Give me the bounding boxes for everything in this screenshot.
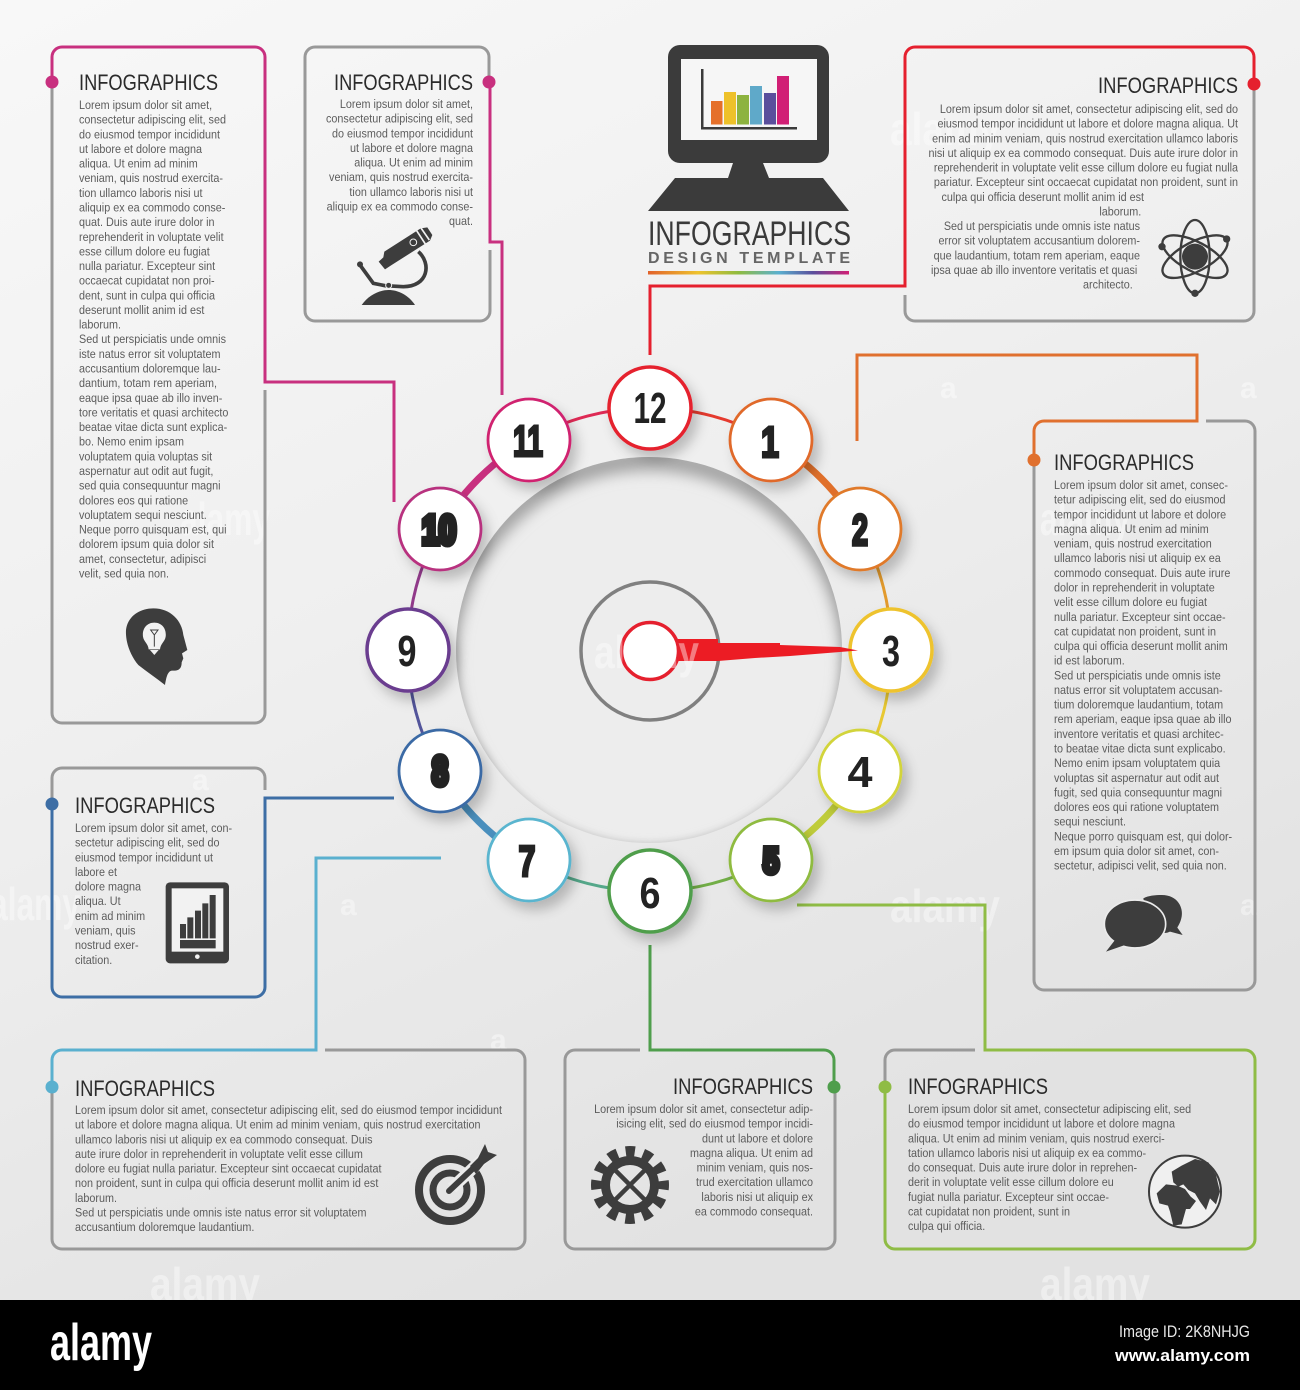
hour 7: 7 xyxy=(518,837,536,886)
body text: tore veritatis et quasi architecto xyxy=(79,407,228,420)
watermarks: alamy xyxy=(1040,1258,1150,1310)
body text: nisi ut aliquip ex ea commodo consequat. Duis aute irure dolor in xyxy=(928,147,1238,160)
body text: labore et xyxy=(75,866,118,879)
body text: non proident, sunt in culpa qui officia deserunt mollit anim id est xyxy=(75,1178,379,1190)
body text: architecto. xyxy=(1083,279,1133,292)
body text: accusantium doloremque lau- xyxy=(79,363,221,376)
body text: consectetur adipiscing elit, sed xyxy=(326,113,473,126)
body text: dent, sunt in culpa qui officia xyxy=(79,290,216,302)
hour 1 xyxy=(730,399,812,481)
hour 10 xyxy=(399,488,481,570)
body text: nulla pariatur. Excepteur sint occae- xyxy=(1054,611,1226,624)
icon: target with arrow xyxy=(419,1144,497,1221)
icon: head with light bulb xyxy=(126,608,187,685)
body text: occaecat cupidatat non proi- xyxy=(79,275,215,288)
body text: magna aliqua. Ut enim ad minim xyxy=(1054,523,1209,536)
body text: em ipsum quia dolor sit amet, con- xyxy=(1054,846,1219,858)
body text: veniam, quis nostrud exercita- xyxy=(329,172,473,184)
hour 10: 10 xyxy=(422,508,456,552)
body text: culpa qui officia deserunt mollit anim xyxy=(1054,641,1228,653)
body text xyxy=(928,104,1239,292)
body text: Lorem ipsum dolor sit amet, con- xyxy=(75,823,232,835)
body text: inventore veritatis et quasi architec- xyxy=(1054,728,1224,741)
hour 2 xyxy=(819,488,901,570)
body text: esse cillum dolore eu fugiat xyxy=(79,246,211,259)
connector arcs xyxy=(408,408,891,891)
icon: gear xyxy=(597,1152,663,1218)
body text: Sed ut perspiciatis unde omnis iste natus xyxy=(944,221,1140,233)
body text: cat cupidatat non proident, sunt in xyxy=(1054,626,1216,639)
icon: globe xyxy=(1149,1156,1221,1228)
body text: velit, sed quia non. xyxy=(79,568,169,581)
body text: Neque porro quisquam est, qui xyxy=(79,524,227,537)
body text: dolores eos qui ratione voluptatem xyxy=(1054,802,1219,814)
watermarks: alamy xyxy=(890,103,1000,155)
hour 1: 1 xyxy=(761,418,779,467)
recessed disc xyxy=(456,457,842,843)
body text: culpa qui officia. xyxy=(908,1221,985,1233)
body text: Lorem ipsum dolor sit amet, consectetur adip- xyxy=(594,1104,813,1116)
hour 12: 12 xyxy=(634,384,666,433)
image id: Image ID: 2K8NHJG xyxy=(1119,1322,1250,1341)
watermarks: a xyxy=(1240,372,1257,405)
hour 11 xyxy=(488,399,570,481)
body text: commodo consequat. Duis aute irure xyxy=(1054,567,1230,580)
body text: iste natus error sit voluptatem xyxy=(79,348,221,361)
body text: dolore magna xyxy=(75,881,142,894)
body text: dolores eos qui ratione xyxy=(79,495,188,507)
body text: ut labore et dolore magna aliqua. Ut enim ad minim veniam, quis nostrud exercitation xyxy=(75,1119,480,1132)
body text: Lorem ipsum dolor sit amet, xyxy=(79,100,212,112)
body text: cat cupidatat non proident, sunt in xyxy=(908,1206,1070,1219)
heading: INFOGRAPHICS xyxy=(1054,450,1194,475)
body text: enim ad minim xyxy=(75,910,145,923)
panel: magenta microscope xyxy=(305,47,502,395)
hour 8: 8 xyxy=(432,750,448,794)
watermarks: alamy xyxy=(150,1258,260,1310)
body text: enim ad minim veniam, quis nostrud exercitation ullamco laboris xyxy=(932,133,1238,145)
body text: aliqua. Ut xyxy=(75,896,121,908)
body text: tium doloremque laudantium, totam xyxy=(1054,699,1223,712)
body text: id est laborum. xyxy=(1054,655,1125,668)
body text: sectetur, adipisci velit, sed quia non. xyxy=(1054,860,1227,873)
body text: sequi nesciunt. xyxy=(1054,816,1126,829)
body text: aspernatur aut odit aut fugit, xyxy=(79,466,213,478)
body text: aute irure dolor in reprehenderit in voluptate velit esse cillum xyxy=(75,1148,363,1161)
body text: minim veniam, quis nos- xyxy=(697,1162,813,1175)
rainbow line xyxy=(648,271,849,274)
hour 5: 5 xyxy=(763,840,779,881)
footer bar xyxy=(0,1300,1300,1390)
body text: laborum. xyxy=(1099,206,1141,219)
body text: Sed ut perspiciatis unde omnis iste natus error sit voluptatem xyxy=(75,1207,367,1220)
icon: microscope xyxy=(357,227,432,305)
body text: laborum. xyxy=(79,319,121,332)
panel: pink top-left xyxy=(46,47,394,723)
body text: consectetur adipiscing elit, sed xyxy=(79,114,226,127)
body text: derit in voluptate velit esse cillum dolore eu xyxy=(908,1177,1114,1189)
body text: tempor incididunt ut labore et dolore xyxy=(1054,509,1226,521)
panel: light green globe xyxy=(797,905,1255,1249)
body text: Sed ut perspiciatis unde omnis xyxy=(79,334,226,346)
body text: Lorem ipsum dolor sit amet, consectetur adipiscing elit, sed do eiusmod tempor incididunt xyxy=(75,1105,503,1117)
clock hand xyxy=(672,639,858,661)
hour 7 xyxy=(488,819,570,901)
watermarks: alamy xyxy=(180,493,270,545)
body text: Nemo enim ipsam voluptatem quia xyxy=(1054,758,1221,770)
body text: dolor in reprehenderit in voluptate xyxy=(1054,582,1215,595)
body text: do eiusmod tempor incididunt ut labore et dolore magna xyxy=(908,1118,1176,1131)
icon: monitor xyxy=(648,45,849,211)
body text: dolore eu fugiat nulla pariatur. Excepteur sint occaecat cupidatat xyxy=(75,1163,382,1176)
hour 11: 11 xyxy=(513,417,543,466)
hour 6: 6 xyxy=(640,869,660,918)
hour 5 xyxy=(730,819,812,901)
body text: Lorem ipsum dolor sit amet, consec- xyxy=(1054,480,1228,492)
clock dial xyxy=(367,367,932,932)
body text: ipsa quae ab illo inventore veritatis et quasi xyxy=(931,264,1137,277)
icon: tablet with chart xyxy=(166,882,229,963)
body text: aliqua. Ut enim ad minim veniam, quis nostrud exerci- xyxy=(908,1133,1165,1145)
body text: deserunt mollit anim id est xyxy=(79,304,205,317)
logo: monitor with bar chart xyxy=(648,45,851,274)
heading: INFOGRAPHICS xyxy=(79,70,218,95)
body text: Neque porro quisquam est, qui dolor- xyxy=(1054,831,1232,844)
hour 9 xyxy=(367,609,449,691)
body text: do consequat. Duis aute irure dolor in reprehen- xyxy=(908,1162,1137,1175)
body text: tion ullamco laboris nisi ut xyxy=(349,186,474,199)
body text: que laudantium, totam rem aperiam, eaque xyxy=(934,250,1140,262)
heading: INFOGRAPHICS xyxy=(908,1074,1048,1099)
body text: error sit voluptatem accusantium dolorem- xyxy=(938,235,1140,248)
panel: green gear xyxy=(565,945,840,1249)
body text: amet, consectetur, adipisci xyxy=(79,553,206,566)
watermarks: alamy xyxy=(890,880,1000,932)
body text: aliquip ex ea commodo conse- xyxy=(327,201,473,214)
heading: INFOGRAPHICS xyxy=(673,1074,813,1099)
logo subtitle: DESIGN TEMPLATE xyxy=(648,250,850,267)
heading: INFOGRAPHICS xyxy=(334,70,473,95)
body text: eiusmod tempor incididunt ut xyxy=(75,852,214,864)
body text: fugit, sed quia consequuntur magni xyxy=(1054,787,1222,800)
body text: natus error sit voluptatem accusan- xyxy=(1054,684,1223,697)
body text: tation ullamco laboris nisi ut aliquip ex ea commo- xyxy=(908,1147,1146,1160)
watermarks: a xyxy=(340,889,357,922)
body text: voluptatem sequi nesciunt. xyxy=(79,509,207,522)
hub center xyxy=(622,622,678,680)
body text: reprehenderit in voluptate velit xyxy=(79,231,224,244)
heading: INFOGRAPHICS xyxy=(75,1076,215,1101)
watermarks: a xyxy=(192,764,209,797)
body text: dantium, totam rem aperiam, xyxy=(79,378,217,390)
logo title: INFOGRAPHICS xyxy=(648,215,851,253)
body text: voluptatem quia voluptas sit xyxy=(79,451,213,464)
panel: red atom xyxy=(650,47,1260,355)
body text: ut labore et dolore magna xyxy=(79,143,203,156)
body text: beatae vitae dicta sunt explica- xyxy=(79,422,227,434)
body text: do eiusmod tempor incididunt xyxy=(79,129,221,141)
body text: tion ullamco laboris nisi ut xyxy=(79,187,203,200)
body text: ut labore et dolore magna xyxy=(350,142,474,155)
body text: pariatur. Excepteur sint occaecat cupidatat non proident, sunt in xyxy=(934,177,1238,189)
hour 6 xyxy=(609,850,691,932)
hour 4: 4 xyxy=(848,748,873,797)
body text: aliqua. Ut enim ad minim xyxy=(354,157,473,170)
body text: Sed ut perspiciatis unde omnis iste xyxy=(1054,670,1221,682)
icon: speech bubbles xyxy=(1104,895,1183,952)
heading: INFOGRAPHICS xyxy=(1098,73,1238,98)
body text: culpa qui officia deserunt mollit anim id est xyxy=(941,192,1145,204)
panel: light blue target xyxy=(46,858,525,1249)
center watermark: alamy xyxy=(594,626,699,678)
watermarks: alamy xyxy=(1040,493,1130,545)
body text: quat. Duis aute irure dolor in xyxy=(79,217,215,229)
body text: fugiat nulla pariatur. Excepteur sint occae- xyxy=(908,1191,1109,1204)
footer logo: alamy xyxy=(50,1314,152,1372)
body text: citation. xyxy=(75,954,112,967)
body text: rem aperiam, eaque ipsa quae ab illo xyxy=(1054,714,1232,726)
body text: dunt ut labore et dolore xyxy=(702,1133,813,1145)
heading: INFOGRAPHICS xyxy=(75,793,215,818)
watermarks: a xyxy=(940,372,957,405)
body text: quat. xyxy=(449,216,473,228)
hour 3 xyxy=(850,609,932,691)
body text: ullamco laboris nisi ut aliquip ex ea commodo consequat. Duis xyxy=(75,1134,373,1146)
body text: nostrud exer- xyxy=(75,940,139,952)
body text: magna aliqua. Ut enim ad xyxy=(690,1147,813,1160)
body text: Lorem ipsum dolor sit amet, consectetur adipiscing elit, sed do xyxy=(940,104,1238,116)
body text: eiusmod tempor incididunt ut labore et dolore magna aliqua. Ut xyxy=(937,118,1239,131)
watermarks: a xyxy=(490,1024,507,1057)
body text: bo. Nemo enim ipsam xyxy=(79,436,184,449)
body text: veniam, quis xyxy=(75,925,136,938)
body text: Lorem ipsum dolor sit amet, xyxy=(340,99,473,111)
hour 4 xyxy=(819,730,901,812)
body text: Lorem ipsum dolor sit amet, consectetur adipiscing elit, sed xyxy=(908,1104,1191,1116)
panel: orange right xyxy=(857,355,1255,990)
body text: dolorem ipsum quia dolor sit xyxy=(79,539,215,551)
body text: accusantium doloremque laudantium. xyxy=(75,1222,254,1234)
body text: ea commodo consequat. xyxy=(695,1206,813,1219)
body text: reprehenderit in voluptate velit esse cillum dolore eu fugiat nulla xyxy=(934,162,1239,175)
hour 3: 3 xyxy=(882,627,900,676)
body text: isicing elit, sed do eiusmod tempor incidi- xyxy=(616,1118,813,1131)
body text: voluptas sit aspernatur aut odit aut xyxy=(1054,772,1220,785)
hub ring xyxy=(581,582,719,720)
body text: laborum. xyxy=(75,1192,117,1205)
body text: veniam, quis nostrud exercitation xyxy=(1054,538,1212,551)
hour 8 xyxy=(399,730,481,812)
body text: aliquip ex ea commodo conse- xyxy=(79,202,226,215)
panel: blue tablet xyxy=(46,768,394,997)
body text: laboris nisi ut aliquip ex xyxy=(701,1191,813,1204)
hour 9: 9 xyxy=(398,627,416,676)
body text: aliqua. Ut enim ad minim xyxy=(79,158,198,171)
icon: atom xyxy=(1156,220,1234,297)
body text: trud exercitation ullamco xyxy=(696,1177,813,1189)
body text: velit esse cillum dolore eu fugiat xyxy=(1054,597,1208,609)
body text: eaque ipsa quae ab illo inven- xyxy=(79,392,223,405)
hour 12 xyxy=(609,367,691,449)
body text: to beatae vitae dicta sunt explicabo. xyxy=(1054,743,1226,756)
watermarks: a xyxy=(1240,889,1257,922)
body text: sectetur adipiscing elit, sed do xyxy=(75,837,220,850)
body text: tetur adipiscing elit, sed do eiusmod xyxy=(1054,494,1226,507)
body text: ullamco laboris nisi ut aliquip ex ea xyxy=(1054,553,1221,565)
footer url: www.alamy.com xyxy=(1114,1346,1250,1365)
body text: nulla pariatur. Excepteur sint xyxy=(79,261,216,273)
body text: do eiusmod tempor incididunt xyxy=(332,128,474,140)
hour 2: 2 xyxy=(852,506,868,555)
body text: veniam, quis nostrud exercita- xyxy=(79,173,223,185)
body text: sed quia consequuntur magni xyxy=(79,480,221,493)
